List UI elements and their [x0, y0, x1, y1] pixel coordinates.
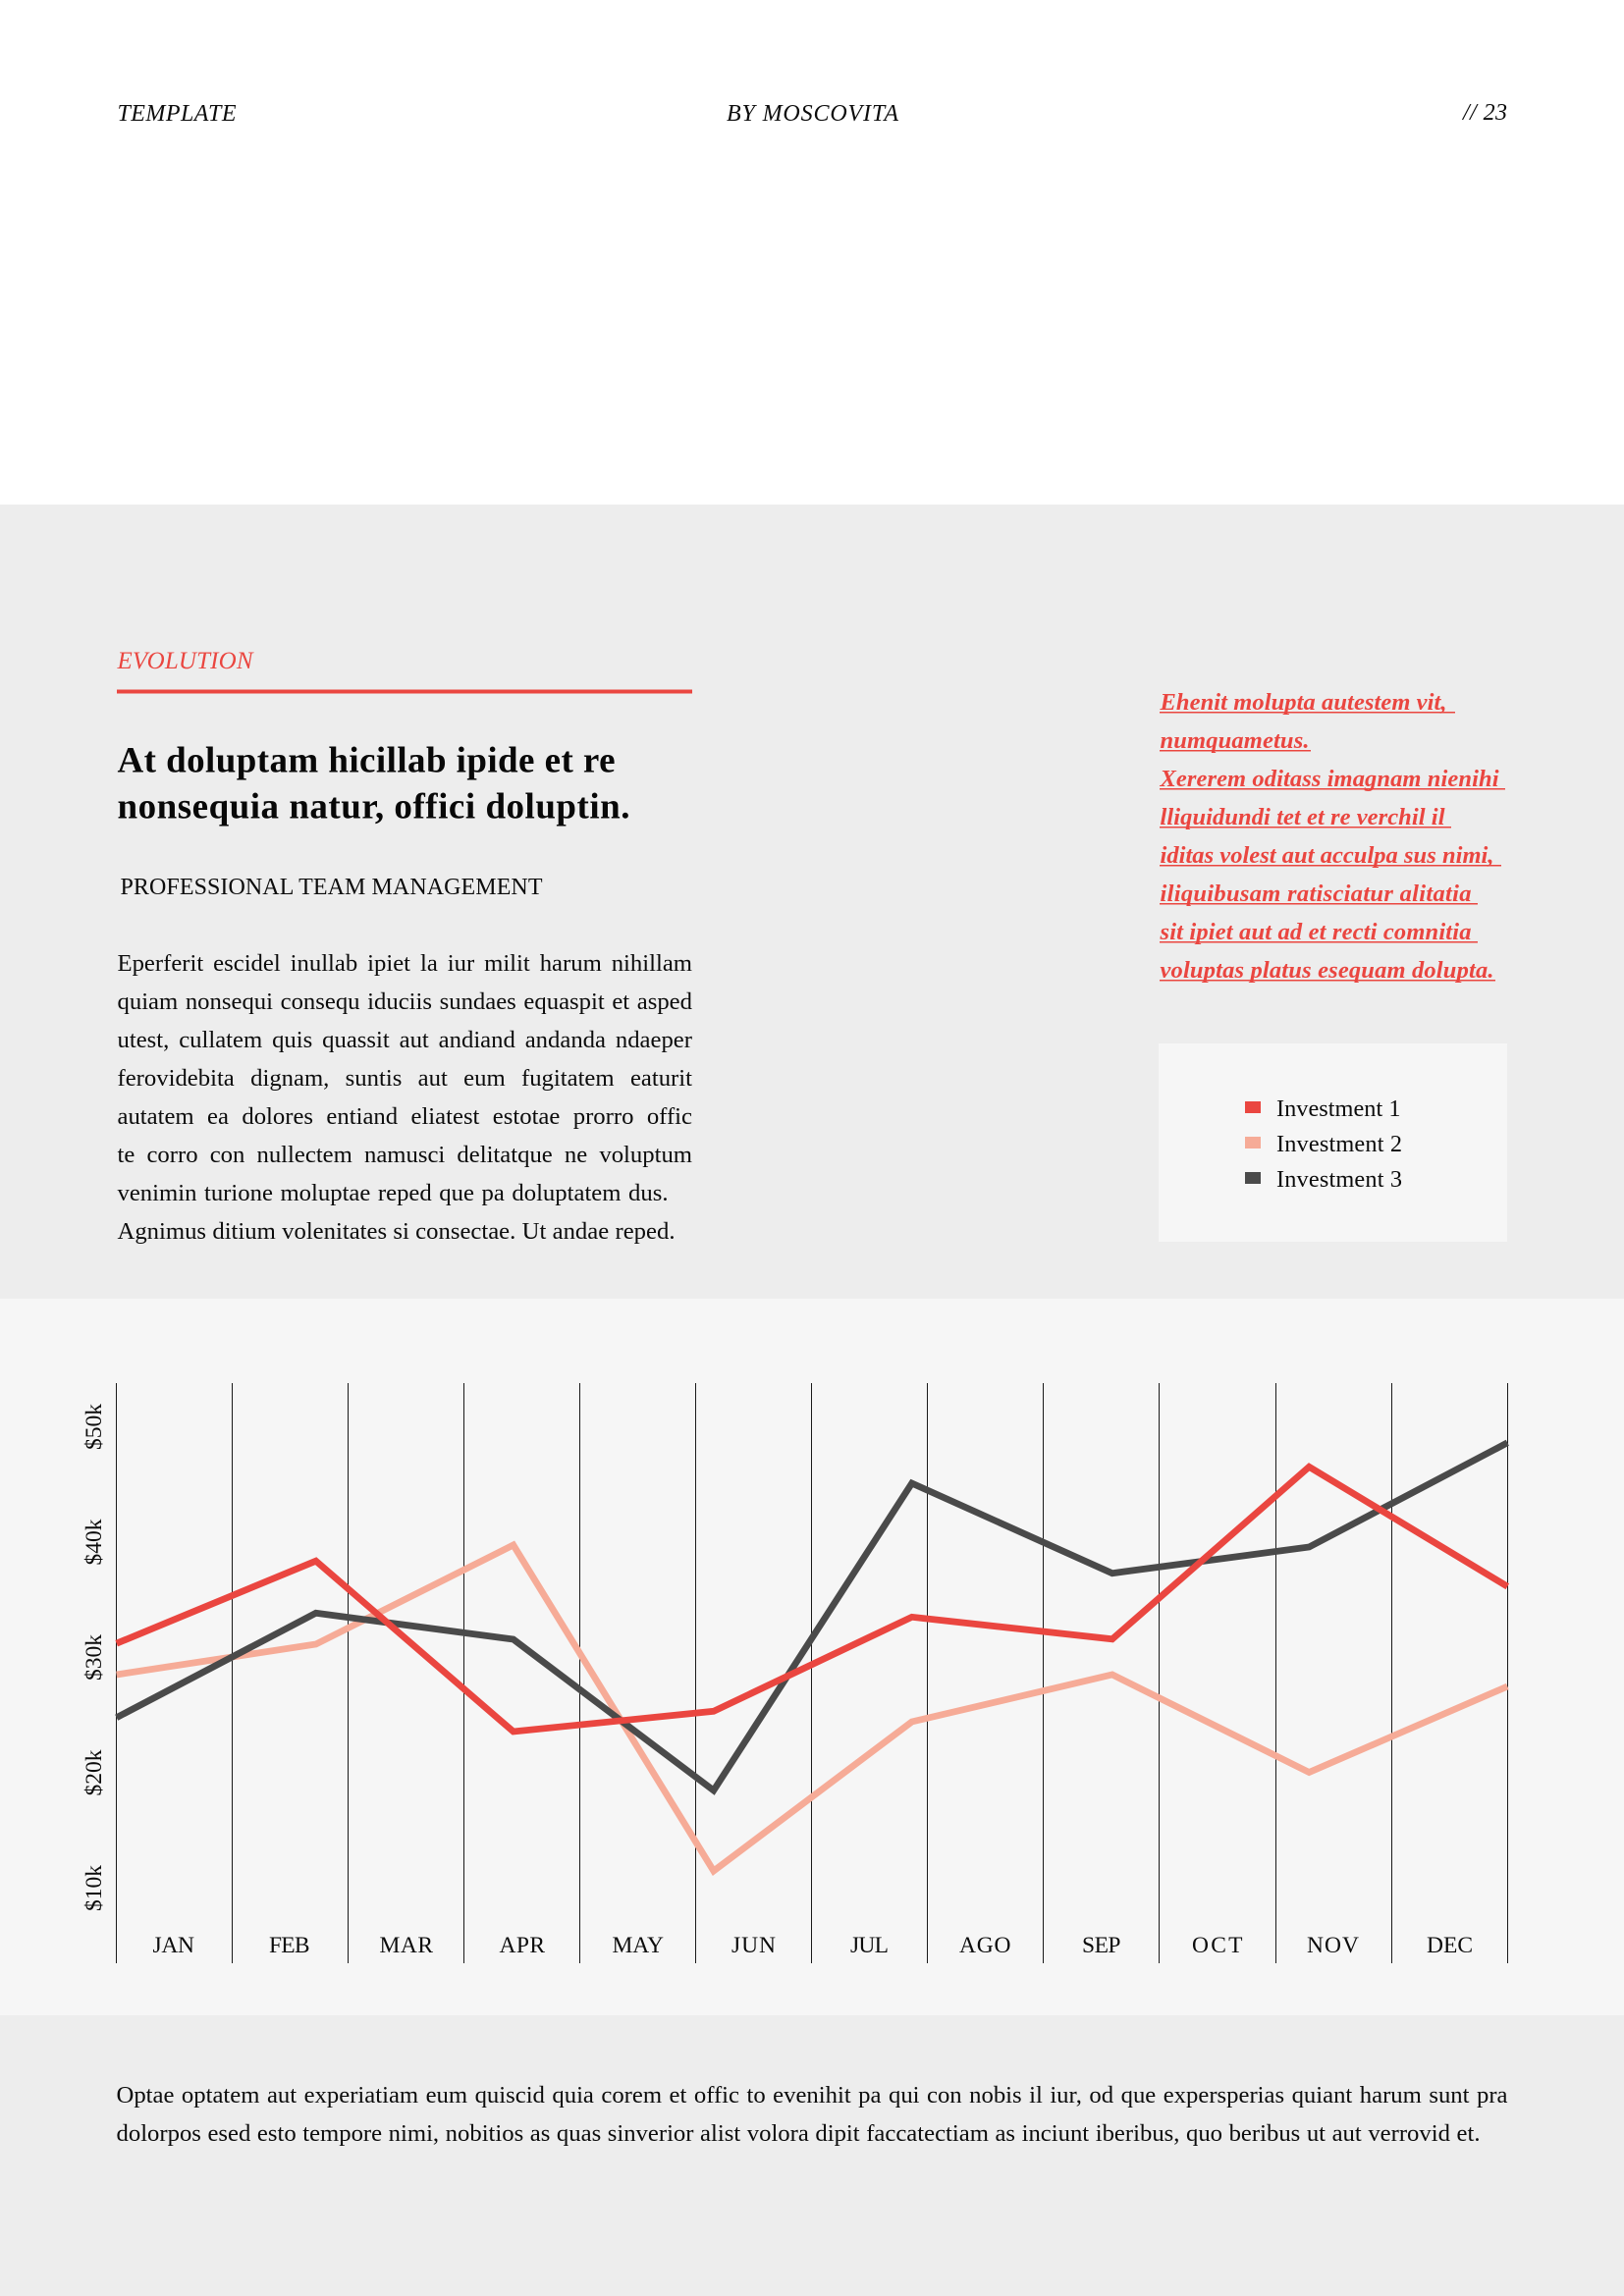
section label: evolution: EVOLUTION: [116, 648, 254, 674]
footer text: [116, 2082, 1508, 2147]
y axis labels: $40k: [81, 1519, 107, 1565]
pull quote: voluptas platus esequam dolupta.: [1161, 957, 1494, 984]
legend item: investment 3: Investment 3: [1276, 1166, 1402, 1193]
legend item: investment 1: Investment 1: [1276, 1095, 1400, 1122]
pull quote: [1159, 689, 1505, 984]
heading: [118, 740, 630, 827]
page header: TEMPLATE: [118, 101, 237, 127]
body text: Agnimus ditium volenitates si consectae. Ut andae reped.: [118, 1218, 676, 1245]
page header: BY MOSCOVITA: [727, 101, 898, 127]
heading: At doluptam hicillab ipide et re: [118, 740, 615, 781]
y axis labels: $10k: [81, 1865, 107, 1911]
body text: [118, 950, 692, 1245]
page header: // 23: [1461, 100, 1507, 126]
x axis month labels: SEP: [1082, 1933, 1121, 1958]
body text: autatem ea dolores entiand eliatest estotae prorro offic: [118, 1103, 692, 1130]
body text: Eperferit escidel inullab ipiet la iur milit harum nihillam: [118, 950, 692, 977]
pull quote: numquametus.: [1161, 727, 1310, 754]
x axis month labels: JUL: [850, 1933, 889, 1958]
pull quote: iditas volest aut acculpa sus nimi,: [1161, 842, 1494, 869]
subheading: PROFESSIONAL TEAM MANAGEMENT: [120, 875, 543, 900]
series: investment 1: [117, 1467, 1507, 1732]
y axis labels: [81, 1404, 107, 1911]
y axis labels: $50k: [81, 1404, 107, 1450]
legend item: investment 2: Investment 2: [1276, 1131, 1402, 1157]
x axis month labels: DEC: [1427, 1933, 1473, 1958]
body text: te corro con nullectem namusci delitatque ne voluptum: [118, 1142, 692, 1168]
pull quote: iliquibusam ratisciatur alitatia: [1161, 881, 1471, 907]
legend: [1159, 1043, 1507, 1242]
x axis month labels: MAY: [613, 1933, 664, 1958]
x axis month labels: JAN: [153, 1933, 194, 1958]
panel: upper grey band: [0, 505, 1624, 1299]
panel: footer band: [0, 2015, 1624, 2296]
body text: utest, cullatem quis quassit aut andiand andanda ndaeper: [118, 1027, 692, 1053]
panel: chart background: [0, 1299, 1624, 2015]
series: investment 2: [117, 1545, 1507, 1871]
line chart: [81, 1383, 1508, 1963]
heading: nonsequia natur, offici doluptin.: [118, 787, 630, 827]
x axis month labels: [153, 1933, 1473, 1958]
body text: ferovidebita dignam, suntis aut eum fugitatem eaturit: [118, 1065, 692, 1092]
pull quote: Ehenit molupta autestem vit,: [1159, 689, 1447, 716]
x axis month labels: JUN: [731, 1933, 776, 1958]
body text: quiam nonsequi consequ iduciis sundaes equaspit et asped: [118, 988, 692, 1015]
x axis month labels: FEB: [269, 1933, 310, 1958]
page header: [118, 100, 1507, 127]
y axis labels: $20k: [81, 1749, 107, 1796]
month grid lines: [116, 1383, 1508, 1963]
pull quote: Xererem oditass imagnam nienihi: [1159, 766, 1499, 792]
section label: evolution: [116, 648, 692, 693]
x axis month labels: OCT: [1192, 1933, 1243, 1958]
x axis month labels: NOV: [1307, 1933, 1359, 1958]
body text: venimin turione moluptae reped que pa doluptatem dus.: [118, 1180, 668, 1206]
x axis month labels: APR: [499, 1933, 545, 1958]
footer text: Optae optatem aut experiatiam eum quiscid quia corem et offic to evenihit pa qui con nobis il iur, od que expersperias quiant harum sunt pra: [116, 2082, 1508, 2109]
pull quote: sit ipiet aut ad et recti comnitia: [1159, 919, 1471, 945]
footer text: dolorpos esed esto tempore nimi, nobitios as quas sinverior alist volora dipit faccatectiam as inciunt iberibus, quo beribus ut aut verrovid et.: [116, 2120, 1481, 2147]
pull quote: lliquidundi tet et re verchil il: [1161, 804, 1445, 830]
x axis month labels: MAR: [379, 1933, 433, 1958]
x axis month labels: AGO: [959, 1933, 1011, 1958]
series: investment 3: [117, 1443, 1507, 1790]
y axis labels: $30k: [81, 1634, 107, 1681]
